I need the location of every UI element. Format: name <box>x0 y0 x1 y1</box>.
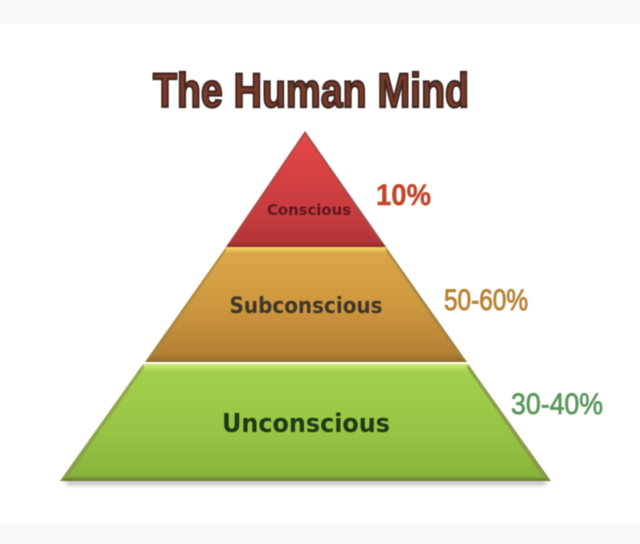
tier: unconscious <box>60 364 551 481</box>
label: subconscious: Subconscious <box>230 294 382 319</box>
title: The Human Mind <box>153 65 469 118</box>
pyramid <box>60 131 551 485</box>
label: unconscious: Unconscious <box>222 409 390 439</box>
tier: subconscious <box>145 247 467 362</box>
percentage: 10%: 10% <box>376 179 431 212</box>
label: conscious: Conscious <box>267 201 351 219</box>
percentage: 30-40%: 30-40% <box>511 388 603 421</box>
pyramid shadow <box>66 480 546 485</box>
tier: conscious <box>226 131 386 247</box>
percentage: 50-60%: 50-60% <box>444 284 528 317</box>
